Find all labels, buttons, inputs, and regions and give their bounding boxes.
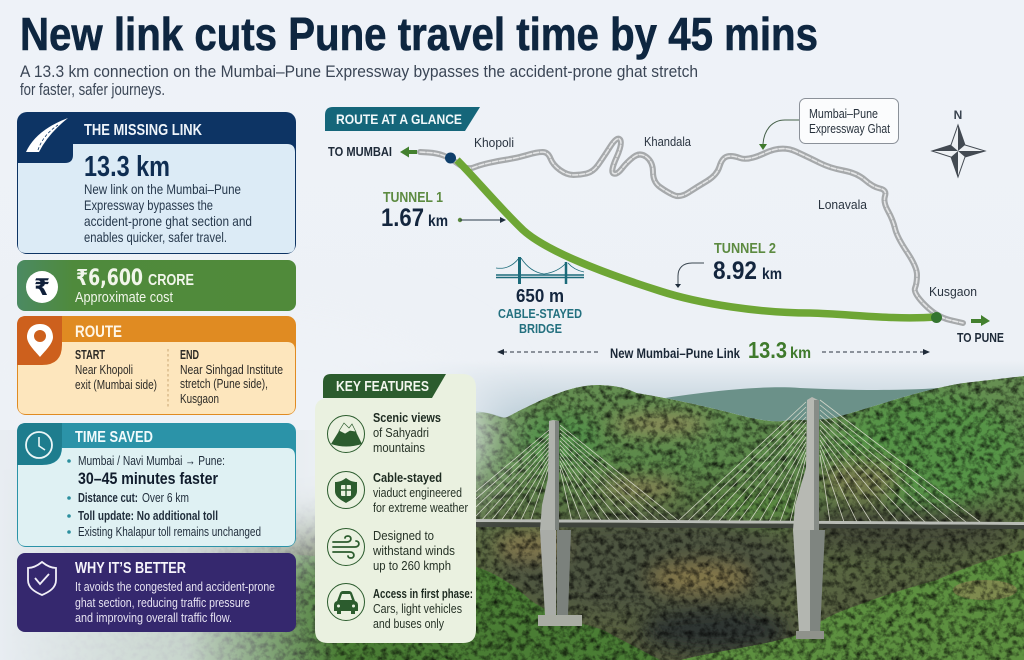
icon: clock (26, 432, 52, 458)
label: tunnel 2 (675, 241, 782, 288)
callout: expressway ghat (759, 98, 898, 150)
new link route (457, 160, 937, 318)
icon: rupee: ₹ (34, 275, 50, 301)
label: tunnel 2: TUNNEL 2 (714, 241, 776, 257)
subtitle: for faster, safer journeys. (20, 80, 165, 99)
map: route at a glance (325, 98, 1004, 363)
route start: exit (Mumbai side) (75, 377, 157, 392)
panel: key features (315, 374, 476, 643)
expressway ghat road (420, 139, 963, 323)
time saved list: Distance cut: (78, 490, 138, 505)
heading tag: ROUTE AT A GLANCE (336, 111, 462, 127)
route end (180, 347, 283, 406)
feature: cable-stayed viaduct (328, 470, 469, 515)
feature: wind resistance (328, 528, 455, 573)
heading tag (323, 374, 446, 398)
span label: new link length: 13.3 (748, 337, 787, 363)
icon: compass (932, 108, 985, 177)
stat: 13.3 km: 13.3 km (84, 151, 170, 183)
time saved list: Mumbai / Navi Mumbai → Pune: (78, 453, 225, 468)
heading tag (325, 107, 480, 131)
label: tunnel 2: km (762, 266, 782, 283)
time saved list: Over 6 km (142, 490, 189, 505)
feature: wind resistance: Designed to (373, 528, 434, 543)
photo: cable-stayed bridge over green mountains (36, 368, 1024, 660)
feature: scenic views (328, 410, 441, 455)
node: Khopoli (445, 152, 456, 164)
span label: new link length: km (790, 345, 811, 362)
heading: THE MISSING LINK (84, 122, 203, 139)
cable-stayed bridge label and icon: 650 m (516, 286, 564, 306)
feature: wind resistance: up to 260 kmph (373, 558, 451, 573)
route end: Kusgaon (180, 391, 219, 406)
panel: why it's better (17, 553, 296, 632)
feature: access in first phase (328, 584, 473, 631)
description: accident-prone ghat section and (84, 213, 252, 229)
bridge deck (470, 519, 1024, 529)
span label: new link length (497, 337, 930, 363)
callout: expressway ghat: Expressway Ghat (809, 122, 890, 136)
label: tunnel 2: 8.92 (713, 257, 757, 285)
stat: cost (75, 266, 194, 306)
feature: scenic views: mountains (373, 440, 425, 455)
time saved list: 30–45 minutes faster (78, 469, 218, 488)
stat: cost: Approximate cost (75, 290, 173, 306)
feature: scenic views: of Sahyadri (373, 425, 429, 440)
icon: location pin (27, 324, 53, 357)
subtitle (20, 62, 698, 99)
place names (474, 134, 977, 299)
subtitle: A 13.3 km connection on the Mumbai–Pune Expressway bypasses the accident-prone ghat stretch (20, 62, 698, 81)
heading tag: KEY FEATURES (336, 379, 429, 395)
panel: time saved (17, 423, 296, 547)
icon: rupee (26, 271, 58, 303)
panel: route (17, 316, 296, 415)
feature: access in first phase: Access in first phase: (373, 586, 473, 601)
route end: stretch (Pune side), (180, 376, 268, 391)
description: Expressway bypasses the (84, 197, 213, 213)
left fog (0, 310, 490, 550)
left fade (0, 430, 340, 660)
panel: cost (17, 260, 296, 311)
feature: access in first phase: Cars, light vehicles (373, 601, 462, 616)
stat: cost: CRORE (148, 272, 194, 289)
heading: TIME SAVED (75, 429, 153, 446)
feature: cable-stayed viaduct: viaduct engineered (373, 485, 462, 500)
bridge cables (440, 400, 980, 522)
route start (75, 347, 157, 392)
left pylon (538, 420, 582, 626)
label: tunnel 1: km (428, 213, 448, 230)
description: and improving overall traffic flow. (75, 610, 232, 625)
route end: Near Sinhgad Institute (180, 362, 283, 377)
label: to Mumbai: TO MUMBAI (328, 145, 392, 159)
stat: cost: ₹6,600 (76, 266, 143, 291)
label: to Pune: TO PUNE (957, 331, 1004, 345)
label: tunnel 1: TUNNEL 1 (383, 190, 443, 206)
label: to Pune (957, 315, 1004, 345)
place names: Kusgaon (929, 284, 977, 299)
feature: cable-stayed viaduct: for extreme weather (373, 500, 469, 515)
place names: Khandala (644, 134, 692, 149)
description: New link on the Mumbai–Pune (84, 181, 241, 197)
description (84, 181, 252, 245)
time saved list: Toll update: No additional toll (78, 508, 218, 523)
route start: Near Khopoli (75, 362, 133, 377)
label: tunnel 1: 1.67 (381, 204, 424, 232)
place names: Lonavala (818, 197, 868, 212)
description: enables quicker, safer travel. (84, 229, 227, 245)
right pylon (793, 397, 825, 639)
span label: new link length: New Mumbai–Pune Link (610, 346, 740, 361)
node: Kusgaon (931, 312, 942, 323)
cable-stayed bridge label and icon (496, 257, 584, 336)
feature: access in first phase: and buses only (373, 616, 444, 631)
cable-stayed bridge label and icon: CABLE-STAYED (498, 306, 582, 321)
icon: compass: N (954, 108, 962, 122)
heading: ROUTE (75, 322, 122, 341)
title: New link cuts Pune travel time by 45 mins (20, 8, 818, 60)
description: It avoids the congested and accident-prone (75, 579, 275, 594)
heading: WHY IT’S BETTER (75, 560, 186, 577)
feature: cable-stayed viaduct: Cable-stayed (373, 470, 442, 485)
route end: END (180, 347, 199, 362)
cable-stayed bridge label and icon: BRIDGE (519, 321, 562, 336)
time saved list: Existing Khalapur toll remains unchanged (78, 524, 261, 539)
callout: expressway ghat: Mumbai–Pune (809, 107, 878, 121)
label: tunnel 1 (381, 190, 506, 232)
description: ghat section, reducing traffic pressure (75, 595, 250, 610)
feature: wind resistance: withstand winds (372, 543, 455, 558)
description (75, 579, 275, 625)
place names: Khopoli (474, 135, 514, 150)
icon: road (26, 118, 68, 152)
feature: scenic views: Scenic views (373, 410, 441, 425)
time saved list (67, 453, 261, 539)
panel: the missing link (17, 112, 296, 254)
route start: START (75, 347, 105, 362)
icon: shield check (28, 562, 56, 595)
